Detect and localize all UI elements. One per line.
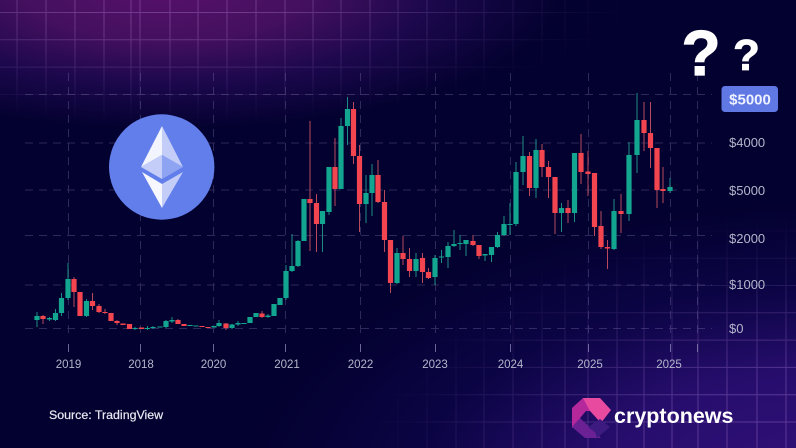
x-axis year labels xyxy=(56,359,682,371)
y-axis price labels: $1000 xyxy=(729,277,765,292)
x-axis year labels: 2025 xyxy=(656,359,682,371)
x-axis year labels: 2023 xyxy=(422,359,448,371)
icon: logo mark xyxy=(572,398,611,438)
x-axis year labels: 2021 xyxy=(274,359,300,371)
small question mark: ? xyxy=(733,31,760,80)
green candle wicks xyxy=(37,93,670,330)
x-axis year labels: 2022 xyxy=(348,359,373,371)
x-axis year labels: 2018 xyxy=(128,359,154,371)
green candle bodies xyxy=(37,109,670,329)
y-axis price labels: $2000 xyxy=(729,231,765,246)
x-axis year labels: 2024 xyxy=(498,359,524,371)
red candle wicks xyxy=(43,102,663,330)
y-axis price labels: $5000 xyxy=(729,183,765,198)
x-axis year labels: 2025 xyxy=(577,359,603,371)
price badge xyxy=(722,86,778,112)
price badge: $5000 xyxy=(729,92,771,108)
y-axis price labels xyxy=(729,135,765,336)
x-axis year labels: 2020 xyxy=(201,359,226,371)
wordmark: cryptonews xyxy=(614,404,734,428)
cryptonews logo xyxy=(572,398,734,438)
red candle bodies xyxy=(43,109,663,329)
candlestick chart xyxy=(37,93,670,330)
x-axis tick marks xyxy=(68,344,698,352)
large question mark: ? xyxy=(681,17,721,89)
source note: Source: TradingView xyxy=(49,408,163,422)
y-axis price labels: $4000 xyxy=(729,135,765,150)
x-axis year labels: 2019 xyxy=(56,359,81,371)
y-axis price labels: $0 xyxy=(729,321,743,336)
icon: Ethereum coin xyxy=(109,114,214,220)
